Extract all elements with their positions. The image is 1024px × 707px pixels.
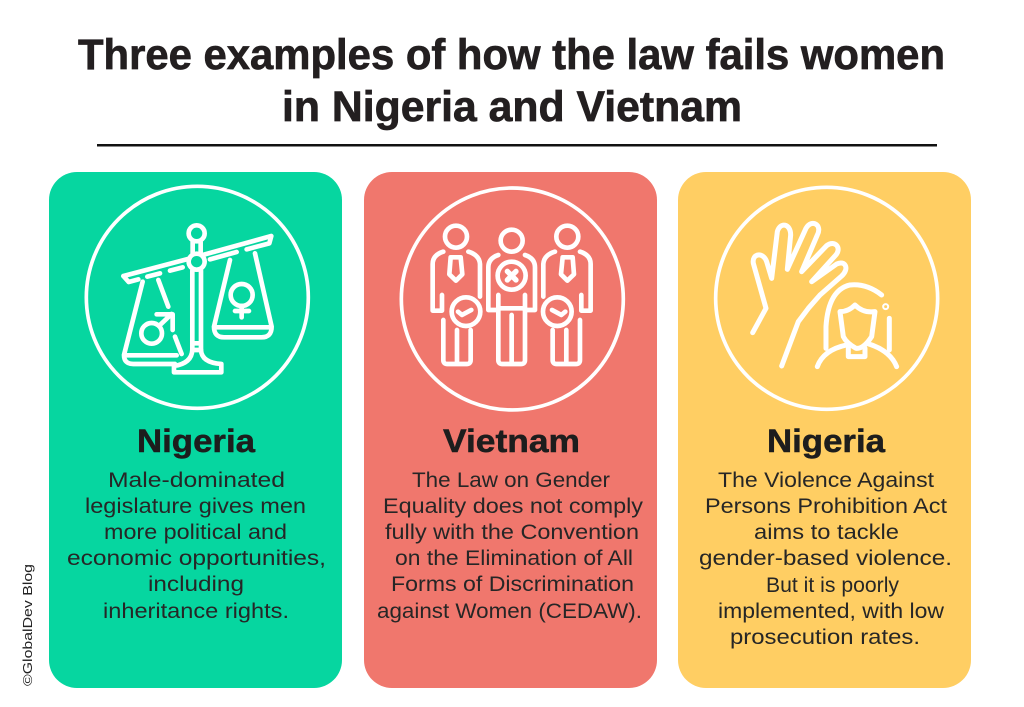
- text block: Nigeria legislature: Male-dominated: [108, 469, 285, 492]
- text block: Violence Against Persons Prohibition Act: prosecution rates.: [730, 626, 920, 649]
- panel: Vietnam: [364, 172, 657, 688]
- title: Three examples of how the law fails women: [78, 31, 945, 79]
- icon part: right figure: [543, 226, 591, 364]
- text block: Violence Against Persons Prohibition Act: The Violence Against: [718, 469, 934, 492]
- text block: Violence Against Persons Prohibition Act: [699, 469, 952, 649]
- heading: Nigeria: Nigeria: [767, 423, 885, 459]
- text block: Vietnam law: on the Elimination of All: [395, 547, 633, 570]
- text block: Nigeria legislature: economic opportunities,: [67, 547, 326, 570]
- icon part: centre figure: [488, 230, 535, 364]
- panel: Nigeria legislature: [49, 172, 342, 688]
- text block: Violence Against Persons Prohibition Act: gender-based violence.: [699, 547, 952, 570]
- text block: Violence Against Persons Prohibition Act: implemented, with low: [718, 600, 945, 623]
- text block: Vietnam law: The Law on Gender: [412, 469, 610, 492]
- text block: Nigeria legislature: [67, 469, 326, 623]
- text block: Nigeria legislature: more political and: [104, 521, 287, 544]
- text block: Violence Against Persons Prohibition Act: Persons Prohibition Act: [705, 495, 947, 518]
- text block: Vietnam law: Equality does not comply: [383, 495, 644, 518]
- title: [78, 31, 945, 131]
- text block: Vietnam law: [377, 469, 644, 623]
- text block: Vietnam law: fully with the Convention: [385, 521, 639, 544]
- icon: three figures with marks: [401, 188, 623, 410]
- text block: Nigeria legislature: legislature gives men: [85, 495, 306, 518]
- text block: Nigeria legislature: including: [148, 573, 244, 596]
- icon part: left figure: [433, 226, 480, 364]
- text block: Violence Against Persons Prohibition Act: aims to tackle: [754, 521, 899, 544]
- text block: Violence Against Persons Prohibition Act: But it is poorly: [766, 574, 899, 597]
- panel: Nigeria violence act: [678, 172, 971, 688]
- icon: raised hand over woman: [716, 187, 938, 409]
- heading: Vietnam: Vietnam: [443, 423, 580, 459]
- heading: Nigeria: Nigeria: [137, 423, 255, 459]
- icon: scales with gender symbols: [86, 186, 308, 408]
- text block: Vietnam law: against Women (CEDAW).: [377, 600, 642, 623]
- credit: ©GlobalDev Blog: [20, 564, 35, 686]
- text block: Vietnam law: Forms of Discrimination: [391, 573, 634, 596]
- title: in Nigeria and Vietnam: [282, 83, 742, 131]
- text block: Nigeria legislature: inheritance rights.: [103, 600, 289, 623]
